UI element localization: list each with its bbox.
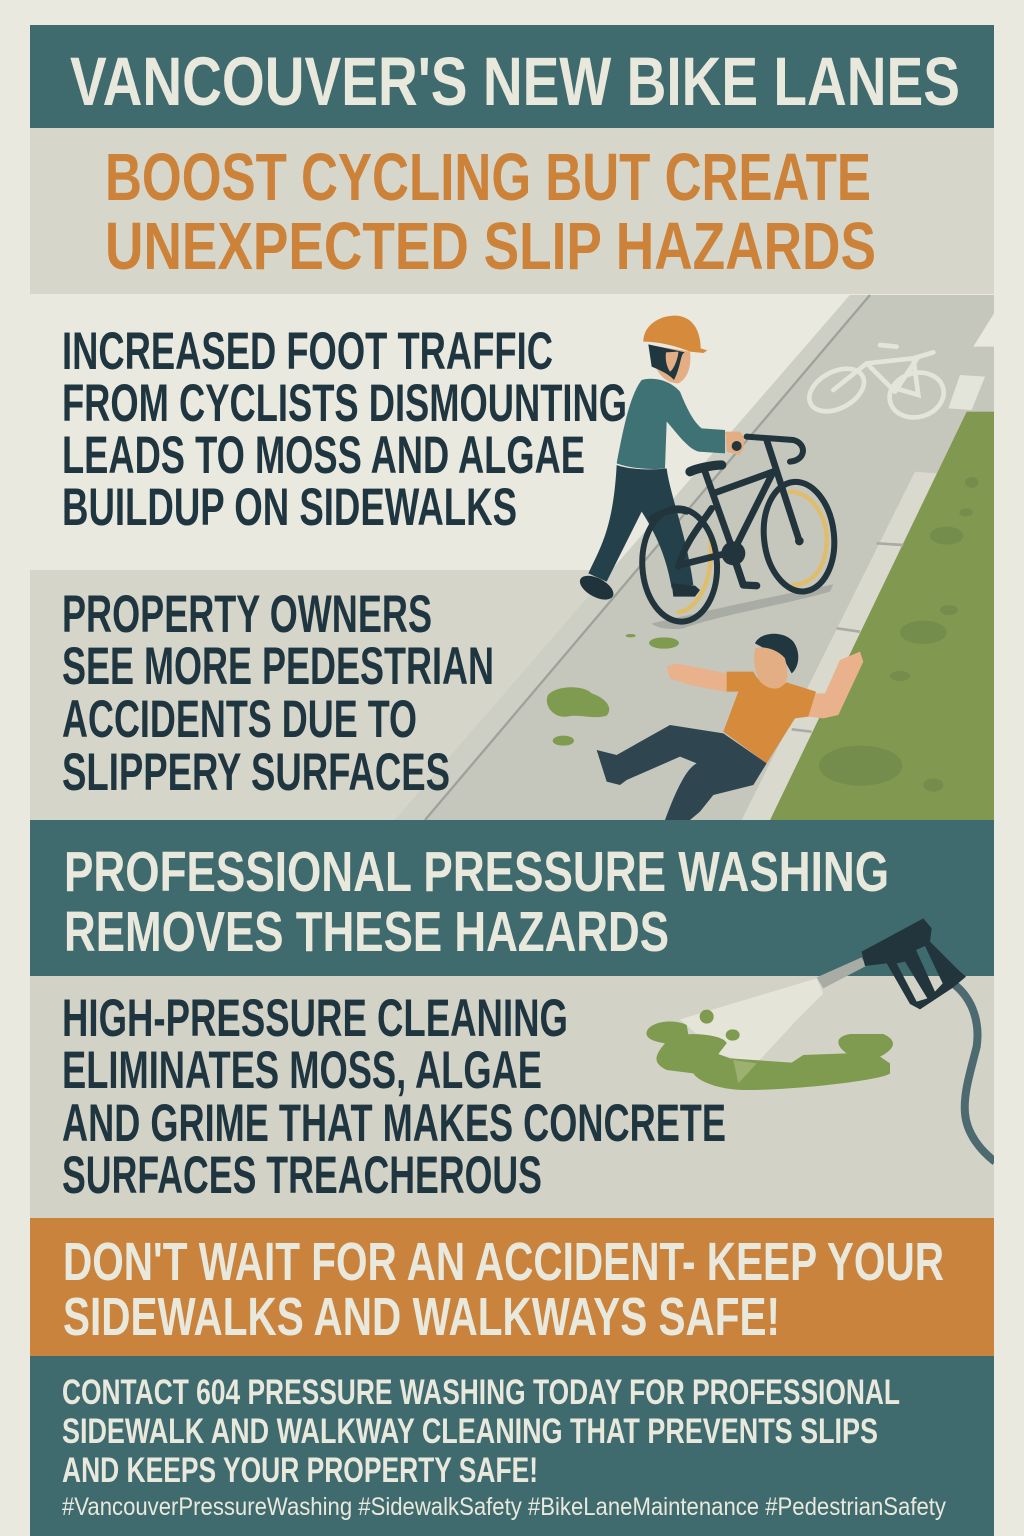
- text block: pedestrian accidents: PROPERTY OWNERS: [62, 585, 432, 644]
- panel: contact: [30, 1356, 994, 1536]
- sweater: [617, 379, 725, 469]
- trousers: [588, 465, 693, 588]
- head: [650, 345, 690, 383]
- curb: [742, 472, 937, 820]
- panel: call to action: [30, 1218, 994, 1356]
- person walking bike: [576, 316, 744, 605]
- text block: cleaning: [62, 989, 726, 1205]
- illustration: pressure washer cleaning moss: [646, 918, 995, 1162]
- text block: cleaning: AND GRIME THAT MAKES CONCRETE: [62, 1094, 726, 1153]
- moss patches: [547, 634, 679, 746]
- helmet: [643, 316, 707, 353]
- illustration: bike lane scene: [395, 295, 994, 820]
- road: [395, 295, 994, 820]
- text block: foot traffic: LEADS TO MOSS AND ALGAE: [62, 426, 585, 485]
- person slipping: [597, 634, 863, 820]
- hose: [955, 985, 995, 1162]
- moss: [646, 1010, 893, 1090]
- panel: title banner: [30, 25, 994, 128]
- panel: pedestrian accidents background: [30, 570, 994, 820]
- text block: foot traffic: INCREASED FOOT TRAFFIC: [62, 322, 553, 381]
- text block: pedestrian accidents: [62, 585, 494, 802]
- contact text: [62, 1373, 900, 1490]
- text block: cleaning: ELIMINATES MOSS, ALGAE: [62, 1041, 542, 1100]
- bike shadow: [652, 584, 833, 629]
- bicycle: [639, 437, 840, 624]
- text block: foot traffic: FROM CYCLISTS DISMOUNTING: [62, 374, 627, 433]
- grass: [770, 412, 994, 820]
- subtitle text: [105, 140, 876, 284]
- nozzle: [817, 957, 866, 988]
- text block: pedestrian accidents: ACCIDENTS DUE TO: [62, 690, 417, 749]
- contact text: AND KEEPS YOUR PROPERTY SAFE!: [62, 1451, 538, 1490]
- panel: subtitle: [30, 128, 994, 294]
- text block: foot traffic: BUILDUP ON SIDEWALKS: [62, 478, 517, 537]
- text block: pedestrian accidents: SLIPPERY SURFACES: [62, 743, 450, 802]
- icon: bike lane symbol: [802, 345, 949, 423]
- panel: cleaning explanation: [30, 976, 994, 1218]
- text block: foot traffic: [62, 322, 627, 537]
- heading: [64, 840, 889, 964]
- text block: cleaning: SURFACES TREACHEROUS: [62, 1146, 542, 1205]
- call to action text: SIDEWALKS AND WALKWAYS SAFE!: [63, 1287, 780, 1347]
- text block: pedestrian accidents: SEE MORE PEDESTRIAN: [62, 637, 494, 696]
- call to action text: [63, 1232, 944, 1347]
- heading: REMOVES THESE HAZARDS: [64, 900, 669, 964]
- panel: pressure washing heading: [30, 820, 994, 976]
- spray: [680, 978, 823, 1063]
- text block: cleaning: HIGH-PRESSURE CLEANING: [62, 989, 568, 1048]
- spray gun: [862, 918, 966, 1009]
